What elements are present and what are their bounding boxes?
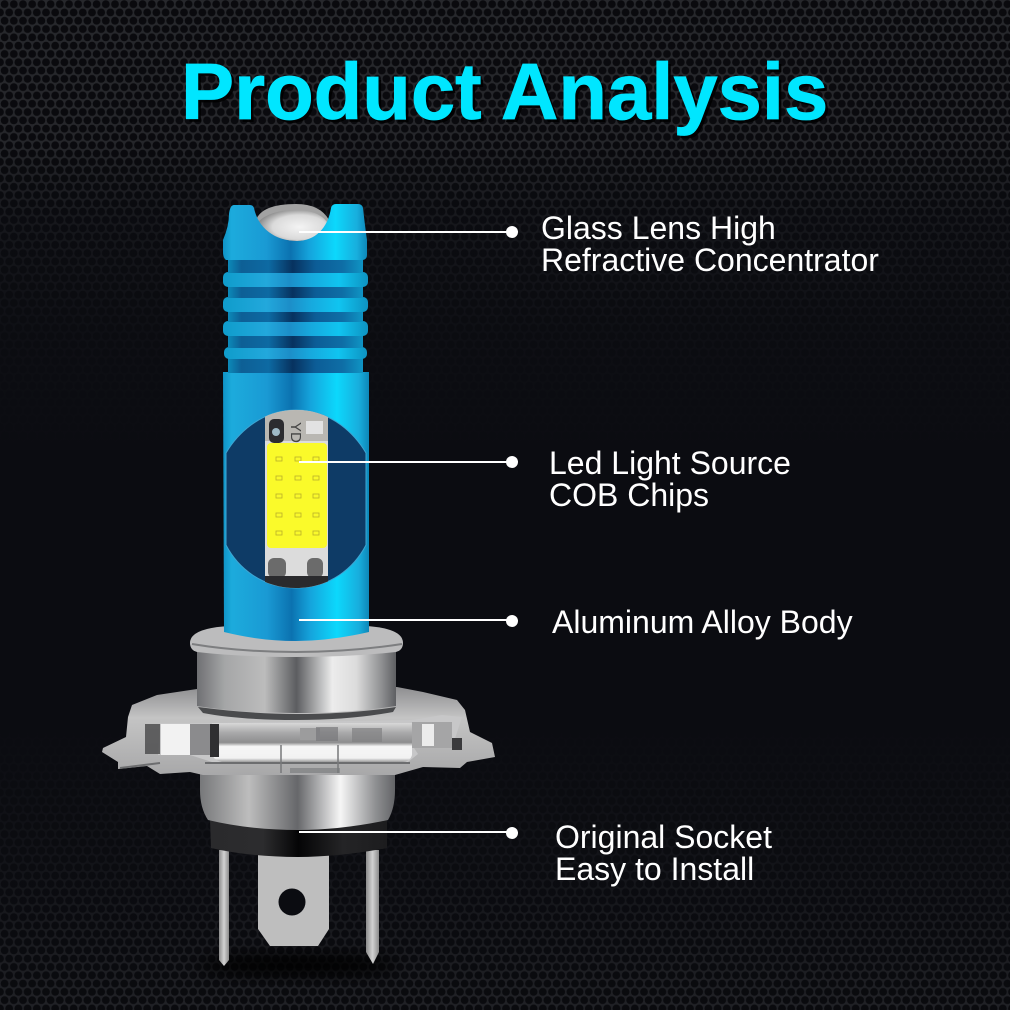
yellow COB emitter <box>267 443 327 548</box>
print marking: YD <box>287 422 304 443</box>
silver collar <box>190 626 403 657</box>
title: Product Analysis <box>184 50 831 139</box>
silver mounting flange <box>102 687 495 775</box>
lens head <box>223 204 367 260</box>
callout: aluminum body <box>299 604 853 640</box>
callout: aluminum body: Aluminum Alloy Body <box>552 604 853 640</box>
callout: LED source <box>299 445 791 513</box>
terminal blades <box>219 850 379 966</box>
callout: glass lens: Refractive Concentrator <box>541 242 879 278</box>
callout: glass lens: Glass Lens High <box>541 210 776 246</box>
callout: LED source: COB Chips <box>549 477 709 513</box>
aluminium body <box>223 372 369 641</box>
bulb illustration <box>102 204 495 975</box>
lower silver cup <box>200 768 395 830</box>
callout: socket <box>299 819 772 887</box>
callout: glass lens <box>299 210 879 278</box>
LED chips <box>276 457 319 535</box>
callout: socket: Original Socket <box>555 819 772 855</box>
title: Product Analysis <box>181 47 828 136</box>
upper silver cylinder <box>197 648 396 713</box>
callout: socket: Easy to Install <box>555 851 754 887</box>
callout: LED source: Led Light Source <box>549 445 791 481</box>
window with COB board <box>226 408 366 590</box>
ground shadow <box>198 955 398 975</box>
circuit board <box>265 408 328 590</box>
black socket ring <box>210 818 387 857</box>
shadow ring under cylinder <box>198 707 396 720</box>
cooling fins <box>223 259 368 373</box>
